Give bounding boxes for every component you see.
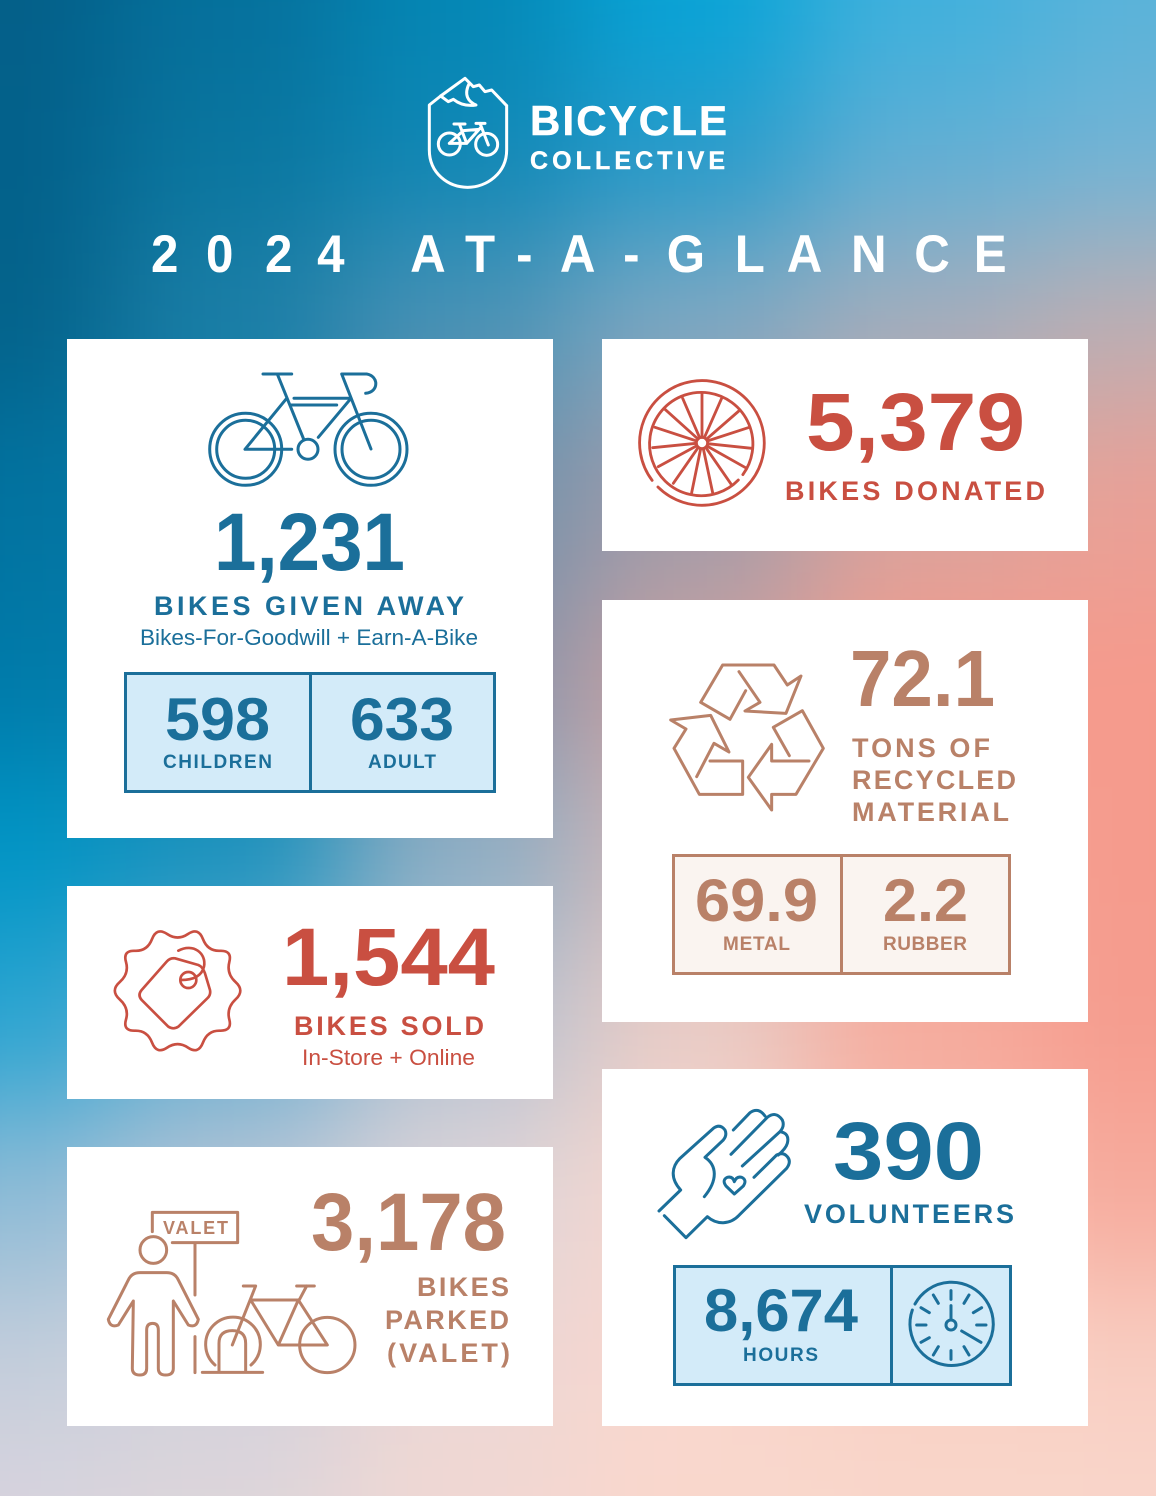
number: 3,178: [311, 1177, 506, 1268]
panel: bikes given away: [67, 339, 553, 838]
number: 1,544: [282, 912, 495, 1003]
number: 72.1: [850, 634, 995, 723]
icon: bicycle: [210, 374, 407, 485]
breakdown box: 598: [165, 686, 270, 753]
panel: bikes parked valet: [67, 1147, 553, 1426]
panel: recycled material: [602, 600, 1088, 1022]
panel: bikes donated: [602, 339, 1088, 551]
breakdown box: 633: [350, 686, 454, 753]
panel: volunteers: [602, 1069, 1088, 1426]
number: 1,231: [214, 497, 405, 588]
title: 2024 AT-A-GLANCE: [151, 224, 1007, 283]
icon: clock: [910, 1282, 993, 1366]
hours box: [674, 1266, 1010, 1385]
breakdown box: [674, 855, 1010, 974]
breakdown box: METAL: [723, 934, 790, 955]
label: [385, 1272, 510, 1368]
label: BIKES: [417, 1272, 509, 1302]
icon: valet person and bike: [108, 1212, 355, 1375]
breakdown box: 2.2: [883, 867, 968, 934]
breakdown box: [126, 673, 494, 792]
label: BIKES GIVEN AWAY: [154, 591, 464, 621]
breakdown box: CHILDREN: [163, 752, 272, 773]
logo: [429, 78, 727, 187]
brand name: BICYCLE: [530, 97, 727, 144]
breakdown box: ADULT: [368, 752, 436, 773]
number: 5,379: [806, 377, 1025, 468]
icon: recycle arrows: [671, 665, 823, 810]
sub label: In-Store + Online: [302, 1045, 475, 1070]
label: (VALET): [387, 1338, 510, 1368]
label: [852, 733, 1016, 827]
label: BIKES DONATED: [785, 476, 1045, 506]
hours box: 8,674: [704, 1277, 859, 1344]
breakdown box: RUBBER: [883, 934, 967, 955]
label: TONS OF: [852, 733, 990, 763]
sign text: VALET: [163, 1218, 228, 1238]
panel: bikes sold: [67, 886, 553, 1099]
label: RECYCLED: [852, 765, 1016, 795]
icon: shield with mountains and bicycle: [429, 78, 507, 187]
icon: price tag badge: [115, 931, 240, 1050]
label: BIKES SOLD: [294, 1011, 484, 1041]
label: VOLUNTEERS: [804, 1199, 1014, 1229]
label: PARKED: [385, 1305, 509, 1335]
icon: hand with heart: [659, 1110, 789, 1238]
brand subname: COLLECTIVE: [530, 147, 725, 175]
number: 390: [833, 1106, 984, 1197]
icon: wheel: [640, 381, 764, 505]
breakdown box: 69.9: [695, 867, 818, 934]
hours box: HOURS: [743, 1345, 818, 1366]
label: MATERIAL: [852, 797, 1009, 827]
sub label: Bikes-For-Goodwill + Earn-A-Bike: [140, 625, 478, 650]
